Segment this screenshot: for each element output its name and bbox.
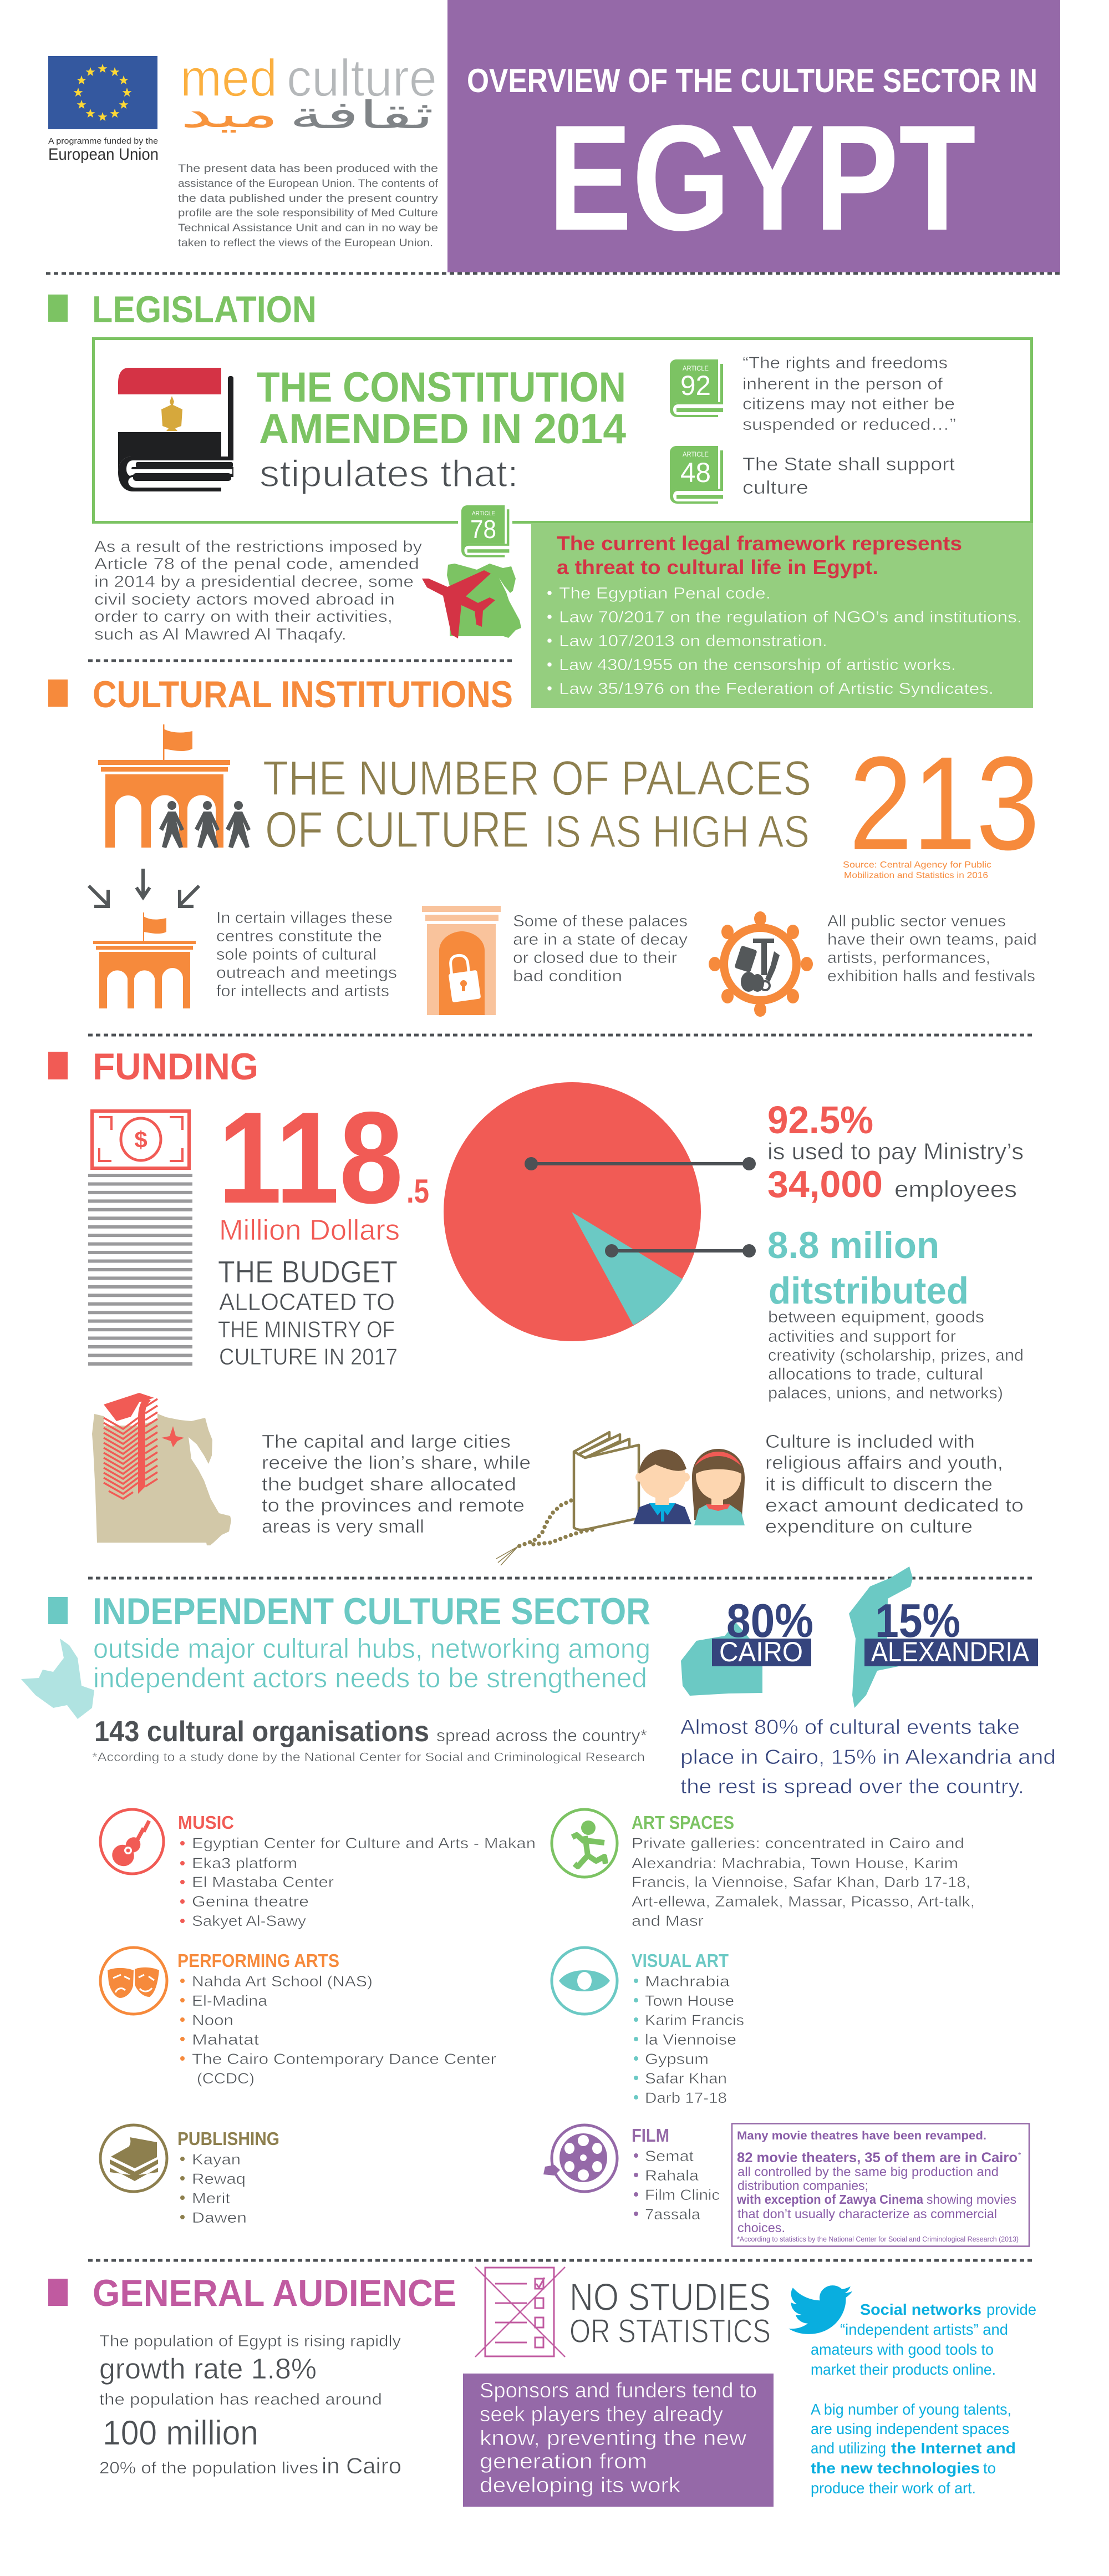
list: music: MUSIC	[178, 1812, 234, 1833]
Med Culture logo: ميد	[180, 92, 279, 136]
religious affairs text: exact amount dedicated to	[765, 1495, 1024, 1515]
icon: flag book	[118, 368, 233, 491]
social networks text: are using independent spaces	[811, 2420, 1009, 2437]
Med Culture logo: ثقافة	[289, 93, 434, 137]
article 48 text: The State shall support	[742, 454, 955, 474]
capital and cities text: receive the lion’s share, while	[262, 1452, 531, 1473]
source note: Source: Central Agency for Public	[843, 860, 991, 870]
article 78 text: order to carry on with their activities,	[94, 608, 393, 626]
decay text: Some of these palaces	[513, 912, 688, 930]
panel: movie theatres	[732, 2123, 1029, 2247]
icon: performing arts masks	[100, 1948, 167, 2014]
icon: map with tower	[92, 1389, 231, 1545]
icon: article 48 book	[670, 446, 723, 504]
village centres text	[216, 909, 397, 1000]
icon: dove	[21, 1639, 94, 1719]
callout: 8.8 million	[767, 1224, 1024, 1402]
panel: movie theatres: all controlled by the same big production and	[737, 2164, 999, 2179]
list: art spaces: Alexandria: Machrabia, Town House, Karim	[632, 1855, 958, 1872]
list: film	[632, 2125, 720, 2223]
article 48 text: culture	[742, 477, 808, 498]
list: publishing: Dawen	[192, 2209, 247, 2226]
callout: 8.8 million: 8.8 milion	[767, 1224, 939, 1266]
heading: general audience: GENERAL AUDIENCE	[93, 2272, 456, 2314]
callout: 92.5%: employees	[894, 1176, 1017, 1202]
list: film: 7assala	[645, 2206, 701, 2223]
article 92 quote: suspended or reduced…”	[742, 415, 956, 434]
village centres text: for intellects and artists	[216, 982, 389, 1000]
Cairo stat: CAIRO	[719, 1636, 803, 1667]
icon: Egypt map with plane	[422, 564, 521, 638]
icon: article 92 book: ARTICLE	[683, 364, 709, 372]
Med Culture logo	[180, 49, 437, 137]
population text: the population has reached around	[99, 2391, 382, 2408]
icon: banknote stack	[92, 1111, 189, 1366]
book	[574, 1432, 639, 1530]
panel: sponsors and funders	[463, 2374, 774, 2507]
budget caption: THE MINISTRY OF	[218, 1316, 395, 1342]
list: art spaces: Francis, la Viennoise, Safar Khan, Darb 17-18,	[632, 1874, 970, 1890]
laws list: Law 430/1955 on the censorship of artistic works.	[559, 656, 956, 674]
list: performing arts: El-Madina	[192, 1992, 268, 2009]
stat: 213: 213	[849, 729, 1040, 878]
social networks text: to	[983, 2460, 996, 2477]
panel: movie theatres: *	[1018, 2151, 1021, 2159]
callout: 8.8 million: palaces, unions, and networks)	[768, 1384, 1003, 1402]
list: music: Egyptian Center for Culture and Arts - Makan	[192, 1835, 536, 1852]
list: performing arts: Noon	[192, 2012, 233, 2029]
Alexandria stat: 15%	[875, 1595, 960, 1647]
capital and cities text: to the provinces and remote	[262, 1495, 525, 1515]
population text: growth rate 1.8%	[99, 2353, 317, 2385]
list: publishing: Kayan	[192, 2151, 241, 2168]
source note: Mobilization and Statistics in 2016	[844, 871, 988, 880]
panel: movie theatres: showing movies	[927, 2192, 1016, 2207]
panel: movie theatres: choices.	[737, 2220, 785, 2235]
organisations stat	[92, 1716, 647, 1764]
article 78 text: Article 78 of the penal code, amended	[94, 555, 419, 573]
article 92 quote: “The rights and freedoms	[742, 354, 948, 372]
list: film: Semat	[645, 2148, 694, 2164]
callout: 8.8 million: activities and support for	[768, 1327, 956, 1346]
decay text: are in a state of decay	[513, 931, 688, 949]
religious affairs text: expenditure on culture	[765, 1516, 973, 1537]
constitution heading: AMENDED IN 2014	[259, 405, 626, 453]
list: art spaces: and Masr	[632, 1913, 704, 1929]
stipulates text: stipulates that:	[260, 453, 518, 495]
social networks text: market their products online.	[811, 2361, 996, 2378]
stat: budget amount: 118	[218, 1084, 403, 1230]
list: visual art: Gypsum	[645, 2051, 709, 2067]
list: visual art	[632, 1950, 744, 2106]
social networks text: A big number of young talents,	[811, 2401, 1011, 2418]
public venues text: All public sector venues	[827, 912, 1006, 930]
panel: constitution	[93, 338, 1031, 523]
Med Culture logo: med	[180, 49, 277, 108]
village centres text: In certain villages these	[216, 909, 393, 927]
social networks text	[811, 2301, 1036, 2497]
palaces headline	[263, 751, 811, 858]
decay text	[513, 912, 688, 985]
budget caption	[218, 1254, 398, 1370]
icon: music guitar	[100, 1809, 164, 1874]
panel: movie theatres: Many movie theatres have been revamped.	[737, 2129, 986, 2142]
callout: 92.5%: 34,000	[767, 1163, 883, 1205]
icon: eagle	[161, 396, 182, 431]
population text: The population of Egypt is rising rapidly	[99, 2332, 401, 2350]
stat: budget amount: .5	[406, 1173, 429, 1210]
panel: movie theatres: distribution companies;	[737, 2178, 868, 2193]
laws list: Law 107/2013 on demonstration.	[559, 632, 827, 650]
social networks text: Social networks	[860, 2301, 981, 2318]
cultural events text: place in Cairo, 15% in Alexandria and	[680, 1746, 1056, 1768]
icon: publishing stack	[100, 2125, 167, 2192]
icon: article 92 book: 92	[680, 370, 711, 401]
panel: movie theatres: that don’t usually characterize as commercial	[737, 2207, 997, 2221]
disclaimer text: taken to reflect the views of the European Union.	[178, 237, 433, 249]
callout: 8.8 million: allocations to trade, cultural	[768, 1365, 983, 1383]
framework heading	[557, 532, 962, 579]
icon: art spaces figure	[552, 1809, 617, 1877]
constitution heading: THE CONSTITUTION	[257, 364, 626, 411]
decay text: or closed due to their	[513, 949, 677, 967]
callout: 92.5%: is used to pay Ministry’s	[767, 1138, 1024, 1164]
icon: arrows	[89, 869, 199, 906]
list: performing arts: PERFORMING ARTS	[177, 1950, 339, 1971]
list: art spaces	[632, 1812, 975, 1929]
laws list: Law 35/1976 on the Federation of Artistic Syndicates.	[559, 680, 994, 698]
social networks text: the Internet and	[891, 2440, 1016, 2457]
religious affairs text: Culture is included with	[765, 1431, 975, 1452]
icon: visual art eye	[552, 1948, 617, 2014]
list: music: Sakyet Al-Sawy	[192, 1913, 307, 1929]
disclaimer text: profile are the sole responsibility of Med Culture	[178, 207, 438, 219]
village centres text: outreach and meetings	[216, 964, 397, 982]
list: visual art: Darb 17-18	[645, 2090, 727, 2106]
no studies heading: OR STATISTICS	[569, 2313, 771, 2350]
pie chart	[444, 1082, 756, 1341]
constitution heading	[257, 364, 626, 453]
laws list	[547, 585, 1022, 698]
budget caption: CULTURE IN 2017	[219, 1343, 398, 1370]
village centres text: sole points of cultural	[216, 946, 377, 964]
palaces headline: IS AS HIGH AS	[545, 807, 810, 857]
no studies heading	[569, 2275, 771, 2350]
icon: small palace	[93, 912, 196, 1008]
cultural events text: the rest is spread over the country.	[680, 1775, 1024, 1798]
list: publishing: Merit	[192, 2190, 231, 2207]
list: film: Film Clinic	[645, 2187, 720, 2203]
list: publishing	[177, 2128, 279, 2226]
religious affairs text: it is difficult to discern the	[765, 1474, 993, 1494]
palaces headline: THE NUMBER OF PALACES	[263, 751, 811, 805]
panel: sponsors and funders: developing its work	[480, 2474, 681, 2497]
list: visual art: Karim Francis	[645, 2012, 744, 2029]
Cairo stat: 80%	[726, 1595, 813, 1647]
icon: book, rosary and youth	[496, 1432, 745, 1565]
heading: legislation: LEGISLATION	[92, 288, 317, 331]
article 78 text	[94, 538, 423, 643]
list: film: FILM	[632, 2125, 669, 2146]
article 92 quote: inherent in the person of	[742, 375, 943, 393]
list: visual art: VISUAL ART	[632, 1950, 729, 1971]
list: art spaces: Private galleries: concentrated in Cairo and	[632, 1835, 964, 1852]
list: art spaces: Art-ellewa, Zamalek, Massar, Picasso, Art-talk,	[632, 1893, 975, 1910]
decay text: bad condition	[513, 967, 622, 985]
social networks text: “independent artists” and	[840, 2321, 1008, 2338]
list: publishing: Rewaq	[192, 2171, 246, 2187]
icon: locked palace	[422, 906, 501, 1015]
article 78 text: in 2014 by a presidential decree, some	[94, 573, 414, 591]
framework heading: a threat to cultural life in Egypt.	[557, 556, 878, 579]
heading: cultural institutions: CULTURAL INSTITUTIONS	[93, 673, 513, 716]
country title: EGYPT	[548, 94, 976, 262]
laws list: Law 70/2017 on the regulation of NGO’s and institutions.	[559, 608, 1022, 626]
girl	[692, 1449, 745, 1525]
public venues text: have their own teams, paid	[827, 931, 1037, 949]
public venues text: exhibition halls and festivals	[827, 967, 1035, 985]
panel: movie theatres: with exception of Zawya Cinema	[736, 2192, 923, 2207]
icon: article 48 book: 48	[680, 457, 711, 488]
list: music: Genina theatre	[192, 1893, 309, 1910]
Alexandria stat	[849, 1566, 1038, 1708]
disclaimer text: assistance of the European Union. The contents of	[178, 178, 439, 190]
list: performing arts: Mahatat	[192, 2031, 260, 2048]
organisations stat: spread across the country*	[436, 1726, 647, 1745]
icon: public venues circle	[709, 911, 813, 1017]
panel: sponsors and funders: seek players they already	[480, 2403, 723, 2426]
laws list: The Egyptian Penal code.	[559, 585, 771, 602]
networking text	[93, 1633, 650, 1693]
list: art spaces: ART SPACES	[632, 1812, 734, 1833]
capital and cities text: the budget share allocated	[262, 1474, 516, 1494]
article 78 text: civil society actors moved abroad in	[94, 591, 395, 608]
panel: sponsors and funders: Sponsors and funders tend to	[480, 2379, 757, 2402]
icon: article 92 book	[670, 359, 723, 417]
religious affairs text: religious affairs and youth,	[765, 1452, 1003, 1473]
boy	[633, 1449, 691, 1524]
article 78 text: such as Al Mawred Al Thaqafy.	[94, 626, 347, 643]
public venues text	[827, 912, 1037, 985]
article 92 quote: citizens may not either be	[742, 395, 955, 413]
icon: article 78 book: 78	[470, 515, 496, 544]
list: publishing: PUBLISHING	[177, 2128, 279, 2149]
icon: article 78 book: ARTICLE	[472, 510, 495, 517]
article 48 text	[742, 454, 955, 498]
list: performing arts: Nahda Art School (NAS)	[192, 1973, 373, 1990]
budget caption: ALLOCATED TO	[219, 1289, 395, 1316]
organisations stat: *According to a study done by the National Center for Social and Criminological Research	[92, 1750, 645, 1764]
title banner	[447, 0, 1060, 272]
leader lines	[525, 1157, 756, 1257]
population text: 100 million	[103, 2414, 258, 2452]
social networks text: produce their work of art.	[811, 2479, 976, 2497]
list: film: Rahala	[645, 2167, 699, 2184]
callout: 92.5%: 92.5%	[767, 1098, 873, 1142]
population text	[99, 2332, 401, 2478]
organisations stat: 143 cultural organisations	[94, 1716, 429, 1748]
panel: movie theatres: *According to statistics by the National Center for Social and Criminological Research (2013)	[737, 2235, 1019, 2243]
EU caption: A programme funded by the	[48, 136, 158, 146]
panel: legal framework	[531, 523, 1033, 708]
callout: 8.8 million: creativity (scholarship, prizes, and	[768, 1346, 1024, 1365]
list: visual art: la Viennoise	[645, 2031, 736, 2048]
EU flag logo: European Union	[48, 145, 159, 164]
callout: 92.5%	[767, 1098, 1024, 1205]
heading: independent culture sector: INDEPENDENT CULTURE SECTOR	[93, 1590, 650, 1632]
disclaimer text: Technical Assistance Unit and can in no way be	[178, 222, 438, 234]
icon: palace of culture	[98, 724, 251, 848]
village centres text: centres constitute the	[216, 927, 382, 945]
heading: funding: FUNDING	[93, 1046, 258, 1088]
list: visual art: Machrabia	[645, 1973, 730, 1990]
palaces headline: OF CULTURE	[265, 802, 529, 858]
icon: twitter bird	[788, 2285, 852, 2334]
icon: article 78 book	[458, 502, 512, 560]
capital and cities text: areas is very small	[262, 1516, 424, 1537]
no studies heading: NO STUDIES	[569, 2275, 771, 2319]
framework heading: The current legal framework represents	[557, 532, 962, 555]
cultural events text: Almost 80% of cultural events take	[680, 1716, 1020, 1738]
cultural events text	[680, 1716, 1056, 1798]
social networks text: provide	[986, 2301, 1036, 2318]
article 78 text: As a result of the restrictions imposed by	[94, 538, 423, 556]
disclaimer text	[178, 163, 439, 249]
social networks text: the new technologies	[811, 2460, 980, 2477]
article 92 quote	[742, 354, 956, 434]
networking text: outside major cultural hubs, networking among	[93, 1633, 650, 1664]
icon: film reel	[543, 2125, 617, 2192]
capital and cities text	[262, 1431, 531, 1537]
list: music: El Mastaba Center	[192, 1874, 334, 1890]
list: visual art: Safar Khan	[645, 2070, 727, 2087]
icon: article 48 book: ARTICLE	[683, 450, 709, 458]
religious affairs text	[765, 1431, 1024, 1537]
Cairo stat	[681, 1595, 813, 1696]
panel: sponsors and funders: generation from	[480, 2450, 647, 2473]
list: music	[178, 1812, 536, 1929]
social networks text: amateurs with good tools to	[811, 2341, 994, 2358]
panel: sponsors and funders: know, preventing the new	[480, 2427, 747, 2450]
Med Culture logo: culture	[287, 49, 437, 108]
panel: movie theatres: 82 movie theaters, 35 of them are in Cairo	[737, 2150, 1018, 2166]
disclaimer text: The present data has been produced with the	[178, 163, 438, 175]
list: music: Eka3 platform	[192, 1855, 297, 1872]
callout: 8.8 million: between equipment, goods	[768, 1308, 984, 1326]
disclaimer text: the data published under the present country	[178, 193, 439, 205]
list: visual art: Town House	[645, 1992, 734, 2009]
icon: crossed-out checklist	[475, 2267, 565, 2357]
social networks text: and utilizing	[811, 2440, 886, 2457]
EU flag logo	[48, 56, 159, 164]
callout: 8.8 million: ditstributed	[769, 1270, 969, 1312]
icon: banknote stack: $	[134, 1127, 147, 1153]
networking text: independent actors needs to be strengthened	[93, 1662, 647, 1693]
Alexandria stat: ALEXANDRIA	[871, 1636, 1030, 1667]
list: performing arts: (CCDC)	[197, 2070, 255, 2087]
list: performing arts: The Cairo Contemporary Dance Center	[192, 2051, 496, 2067]
public venues text: artists, performances,	[827, 949, 990, 967]
list: performing arts	[177, 1950, 496, 2087]
capital and cities text: The capital and large cities	[262, 1431, 511, 1452]
source note	[843, 860, 991, 880]
population text: 20% of the population lives	[99, 2459, 318, 2477]
population text: in Cairo	[322, 2454, 401, 2478]
rosary	[496, 1500, 594, 1565]
budget caption: THE BUDGET	[218, 1254, 398, 1289]
stat: budget amount: Million Dollars	[219, 1214, 400, 1246]
